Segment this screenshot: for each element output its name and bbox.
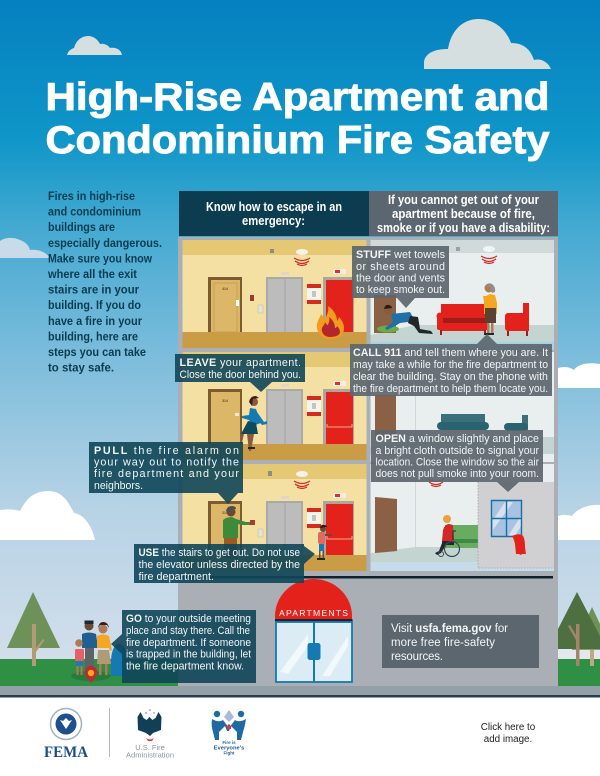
header: cannot get out (369, 191, 558, 236)
callout: visit: resources. (391, 651, 443, 663)
header: know how to escape: Know how to escape in an (206, 200, 342, 214)
callout: go (111, 610, 256, 683)
callout: use (134, 544, 315, 583)
callout: open: OPEN a window slightly and place (376, 433, 539, 445)
callout: leave (175, 354, 305, 392)
callout: stuff: STUFF wet towels (356, 249, 446, 261)
callout: stuff: to keep smoke out. (356, 284, 445, 296)
image placeholder text: Click here to (481, 722, 536, 733)
hallway floor 2: 314 (222, 399, 228, 403)
intro text: especially dangerous. (48, 236, 162, 250)
tree: right (558, 592, 600, 666)
cloud: small top left (67, 36, 122, 55)
callout: visit (382, 615, 539, 668)
panel: grey wall with window (478, 482, 554, 568)
right lawn (558, 649, 600, 686)
title (46, 76, 550, 162)
callout: visit: more free fire-safety (391, 637, 495, 649)
logo: Fire is Everyone's Fight (212, 710, 246, 756)
intro text: building, here are (48, 329, 138, 343)
intro text: building. If you do (48, 298, 141, 312)
title: Condominium Fire Safety (46, 119, 550, 162)
intro text: Make sure you know (48, 251, 153, 265)
callout: call 911: the fire department to help them locate you. (353, 383, 548, 395)
intro text (47, 189, 162, 375)
cloud: left lower (0, 491, 95, 540)
intro text: where all the exit (47, 267, 137, 281)
callout: pull: fire department and your (94, 468, 239, 480)
logo: Fire is Everyone's Fight: Fire is (222, 740, 236, 745)
callout: go: GO to your outside meeting (126, 613, 251, 625)
callout: call 911: may take a while for the fire department to (353, 359, 548, 371)
tree: left (7, 592, 60, 666)
header: cannot get out: If you cannot get out of your (388, 193, 539, 207)
hallway floor 3 (182, 464, 366, 571)
furniture: red armchair (505, 303, 529, 336)
hallway floor 1 (182, 240, 366, 348)
header: know how to escape: emergency: (242, 214, 305, 228)
callout: stuff: or sheets around (356, 261, 445, 273)
callout: open: location. Close the window so the air (376, 456, 539, 468)
callout: open: does not pull smoke into your room. (376, 468, 539, 480)
callout: go: fire department. If someone (126, 637, 251, 649)
intro text: and condominium (48, 205, 141, 219)
header: cannot get out: apartment because of fire, (392, 207, 535, 221)
callout: call 911: clear the building. Stay on the phone with (353, 371, 548, 383)
callout: go: place and stay there. Call the (126, 625, 250, 637)
figure: man pulling alarm (223, 506, 255, 558)
callout: stuff (352, 246, 449, 308)
apartment floor 3 (370, 464, 554, 571)
figure: person stuffing towel (377, 305, 433, 334)
family at meeting place (71, 620, 112, 683)
cloud: left middle (0, 238, 50, 258)
logo: Fire is Everyone's Fight: Everyone's (214, 746, 244, 752)
figure: woman leaving (235, 396, 267, 451)
cloud: right middle (558, 363, 600, 388)
logo: FEMA: FEMA (44, 744, 89, 761)
hallway floor 3: 214 (222, 511, 228, 515)
logo: U.S. Fire Administration: U.S. Fire (135, 743, 165, 752)
callout: use: fire department. (138, 571, 214, 583)
hallway floor 1: 414 (222, 287, 228, 291)
hallway floor 2 (182, 352, 366, 460)
left lawn (0, 659, 178, 686)
logo: U.S. Fire Administration: Administration (126, 750, 174, 760)
awning (275, 579, 352, 622)
callout: leave: LEAVE your apartment. (180, 357, 301, 369)
logo: U.S. Fire Administration (126, 709, 174, 760)
footer (0, 698, 600, 776)
cloud: right lower (558, 505, 600, 540)
awning: APARTMENTS (279, 608, 348, 618)
entrance doors (276, 622, 352, 682)
callout: call 911 (350, 334, 552, 396)
callout: go: is trapped in the building, let (126, 648, 251, 660)
logo: FEMA (44, 708, 89, 761)
furniture: red sofa (436, 304, 490, 335)
intro text: buildings are (48, 220, 115, 234)
callout: use: USE the stairs to get out. Do not use (138, 547, 300, 559)
callout: pull (89, 442, 243, 504)
callout: open (371, 430, 543, 492)
intro text: Fires in high-rise (48, 189, 135, 203)
figure: woman on phone (483, 283, 497, 335)
callout: leave: Close the door behind you. (180, 369, 301, 381)
callout: call 911: CALL 911 and tell them where you are. It (353, 347, 548, 359)
callout: go: the fire department know. (126, 660, 244, 672)
apartment floor 1 (370, 240, 554, 350)
intro text: steps you can take (48, 345, 146, 359)
header: know how to escape (179, 191, 369, 236)
figure: child at stairs (317, 525, 332, 560)
callout: stuff: the door and vents (356, 272, 446, 284)
callout: open: a bright cloth outside to signal your (376, 445, 539, 457)
divider (109, 708, 110, 757)
building (0, 237, 600, 698)
callout: pull: neighbors. (94, 480, 143, 492)
callout: pull: your way out to notify the (94, 456, 239, 468)
callout: pull: PULL the fire alarm on (94, 445, 239, 457)
callout: use: the elevator unless directed by the (138, 559, 300, 571)
intro text: to stay safe. (48, 361, 114, 375)
intro text: have a fire in your (48, 314, 142, 328)
apartment floor 2 (370, 352, 554, 462)
icon: fire (317, 306, 344, 339)
header: cannot get out: smoke or if you have a disability: (377, 221, 550, 235)
figure: person in wheelchair (435, 515, 460, 556)
icon: meeting place tent (111, 644, 130, 676)
title: High-Rise Apartment and (46, 76, 550, 119)
logo: Fire is Everyone's Fight: Fight (224, 750, 235, 756)
cloud: large top right (424, 19, 551, 69)
callout: visit: Visit usfa.fema.gov for (391, 623, 508, 635)
image placeholder text (481, 722, 536, 745)
intro text: stairs are in your (48, 283, 139, 297)
image placeholder text: add image. (484, 734, 532, 745)
